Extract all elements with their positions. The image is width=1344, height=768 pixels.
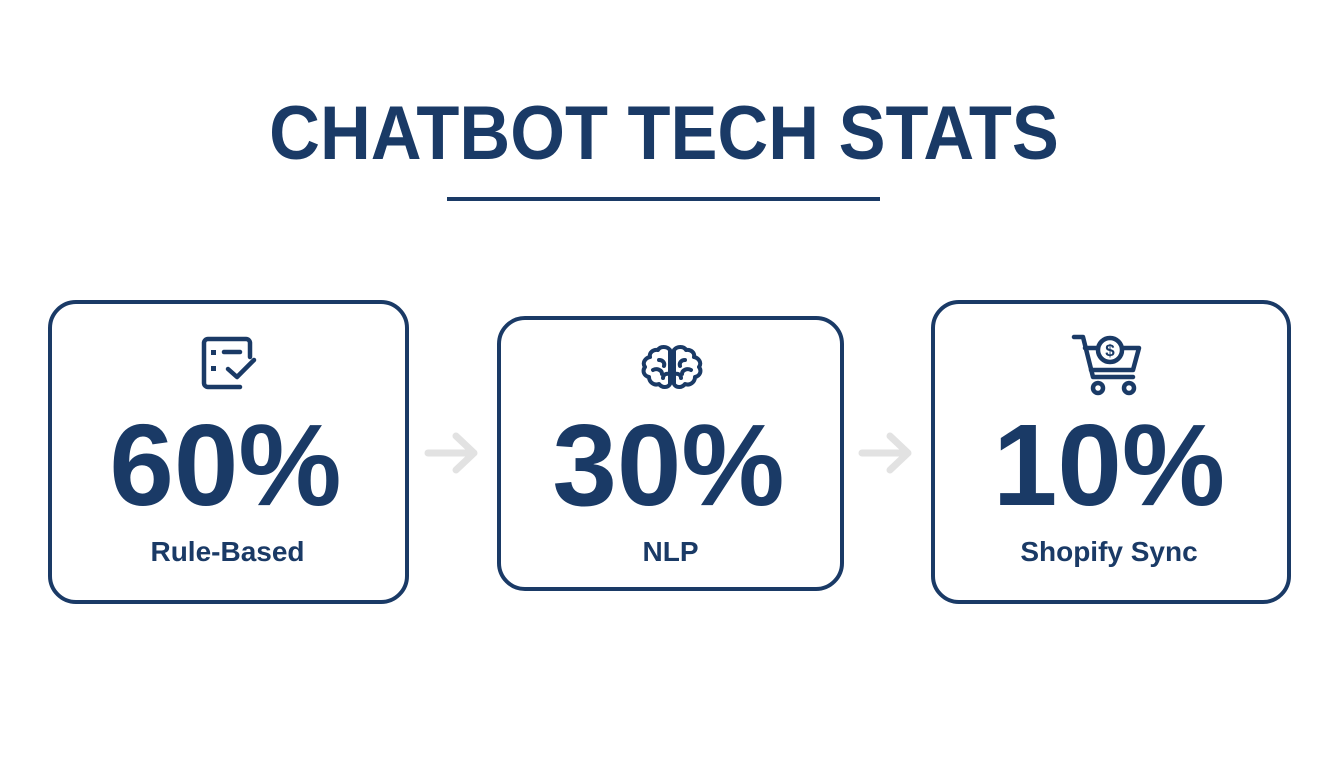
panel: rule-based	[48, 300, 409, 604]
label: Shopify Sync	[1020, 536, 1198, 567]
number: 60%	[109, 400, 342, 530]
number: 30%	[552, 400, 785, 530]
label: Rule-Based	[150, 536, 305, 567]
icon: checklist	[202, 336, 256, 390]
icon: cart with dollar	[1072, 334, 1142, 396]
icon: brain	[642, 345, 702, 389]
panel: NLP	[497, 316, 844, 591]
arrow 2	[858, 432, 912, 474]
title underline	[447, 197, 880, 201]
number: 10%	[993, 400, 1225, 530]
icon: cart with dollar: $	[1105, 341, 1115, 360]
arrow 1	[424, 432, 478, 474]
title: CHATBOT TECH STATS	[269, 91, 1059, 176]
label: NLP	[642, 536, 698, 567]
panel: shopify sync	[931, 300, 1291, 604]
